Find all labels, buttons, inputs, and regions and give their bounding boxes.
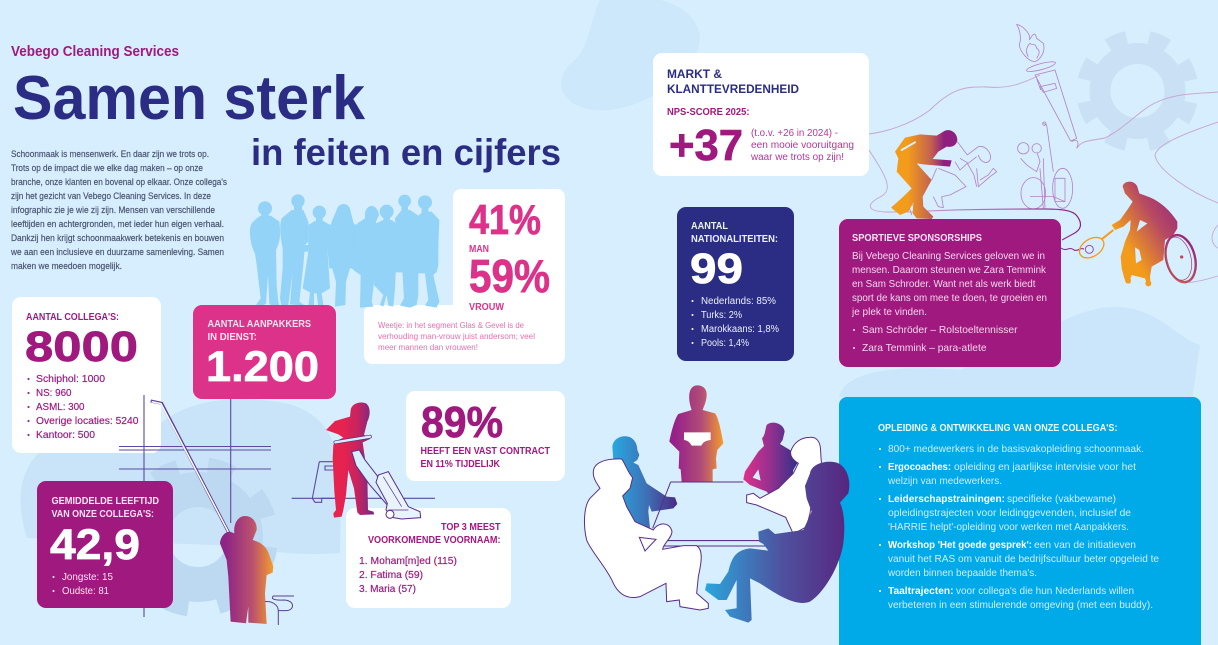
intro text: maken we meedoen mogelijk. — [11, 261, 122, 271]
panel: nationalities: 99 — [690, 245, 743, 293]
intro text: zijn het gezicht van Vebego Cleaning Services. In deze — [11, 191, 211, 201]
panel: training and development: opleiding en jaarlijkse intervisie voor het — [954, 462, 1136, 473]
intro text — [10, 149, 227, 271]
panel: nationalities: NATIONALITEITEN: — [691, 234, 778, 245]
panel: sports sponsorships — [839, 219, 1061, 367]
panel: top 3 first names: 3. Maria (57) — [359, 584, 416, 595]
subtitle: in feiten en cijfers — [251, 132, 561, 173]
intro text: branche, onze klanten en bovenal op elkaar. Onze collega's — [11, 177, 227, 187]
panel: sports sponsorships: en Sam Schroder. Want net als werk biedt — [852, 279, 1036, 290]
panel: sports sponsorships: Zara Temmink – para-atlete — [862, 343, 987, 354]
illustration: line art of torch, athletes and connecting ribbon — [869, 24, 1218, 215]
panel: contract share — [406, 391, 565, 481]
panel: training and development: Ergocoaches: — [888, 462, 951, 473]
panel: training and development: Taaltrajecten: — [888, 586, 954, 597]
panel: market and customer satisfaction: NPS-SCORE 2025: — [667, 107, 750, 118]
illustration: group of people silhouettes — [250, 194, 439, 308]
panel: training and development: specifieke (vakbewame) — [1007, 494, 1116, 505]
illustration: window cleaner with pole — [151, 401, 294, 625]
panel: training and development: Leiderschapstrainingen: — [888, 494, 1005, 505]
panel: number of colleagues — [12, 297, 161, 453]
panel: contract share: 89% — [421, 398, 503, 447]
panel: nationalities: AANTAL — [691, 221, 728, 232]
panel: nationalities: Pools: 1,4% — [701, 338, 749, 349]
panel: top 3 first names: 2. Fatima (59) — [359, 570, 423, 581]
intro text: we aan een inclusieve en duurzame samenleving. Samen — [10, 247, 224, 257]
panel: contract share: EN 11% TIJDELIJK — [420, 459, 501, 470]
panel: sports sponsorships: mensen. Daarom steunen we Zara Temmink — [852, 265, 1047, 276]
panel: training and development: een van de initiatieven — [1034, 540, 1136, 551]
panel: number of colleagues: ASML: 300 — [36, 402, 85, 413]
intro text: infographic zie je wie zij zijn. Mensen van verschillende — [11, 205, 215, 215]
panel: sports sponsorships: Bij Vebego Cleaning Services geloven we in — [852, 251, 1045, 262]
illustration: floor line and warning sign — [292, 462, 435, 502]
panel: gender split: MAN — [469, 244, 489, 255]
panel: top 3 first names: 1. Moham[m]ed (115) — [359, 556, 457, 567]
panel: training and development: 800+ medewerkers in de basisvakopleiding schoonmaak. — [888, 444, 1144, 455]
panel: gender split: 59% — [469, 250, 550, 302]
intro text: leeftijden en achtergronden, met ieder hun eigen verhaal. — [11, 219, 224, 229]
panel: average age: GEMIDDELDE LEEFTIJD — [52, 496, 159, 507]
panel: top 3 first names: VOORKOMENDE VOORNAAM: — [368, 535, 500, 546]
panel: average age: Oudste: 81 — [62, 586, 109, 597]
illustration: runner silhouette and ribbon — [891, 130, 1084, 250]
panel: number of aanpakkers — [193, 305, 336, 399]
panel: training and development: voor collega's die hun Nederlands willen — [956, 586, 1134, 597]
intro text: Schoonmaak is mensenwerk. En daar zijn we trots op. — [11, 149, 209, 159]
panel: gender split: 41% — [469, 196, 541, 243]
panel: average age: Jongste: 15 — [62, 572, 113, 583]
panel: number of colleagues: AANTAL COLLEGA'S: — [26, 312, 119, 323]
panel: contract share: HEEFT EEN VAST CONTRACT — [420, 446, 551, 457]
panel: training and development: verbeteren in een stimulerende omgeving (met een buddy). — [888, 600, 1153, 611]
panel: top 3 first names — [346, 508, 511, 608]
panel: number of colleagues: Schiphol: 1000 — [36, 374, 105, 385]
panel: nationalities: Turks: 2% — [701, 310, 742, 321]
panel: sports sponsorships: Sam Schröder – Rolstoeltennisser — [862, 325, 1018, 336]
panel: market and customer satisfaction: een mooie vooruitgang — [751, 140, 854, 151]
panel: gender split — [364, 189, 565, 364]
panel: sports sponsorships: sport de kans om mee te doen, te groeien en — [852, 293, 1047, 304]
scaffolding lines — [119, 395, 271, 617]
panel: number of colleagues: NS: 960 — [36, 388, 72, 399]
panel: gender split: Weetje: in het segment Glas & Gevel is de — [378, 320, 524, 330]
panel: number of colleagues: 8000 — [25, 323, 138, 371]
panel: average age: VAN ONZE COLLEGA'S: — [52, 509, 154, 520]
panel: nationalities: Marokkaans: 1,8% — [701, 324, 779, 335]
illustration: person with vacuum cleaner — [326, 402, 421, 519]
panel: market and customer satisfaction: MARKT & — [667, 67, 722, 81]
panel: gender split: VROUW — [469, 302, 505, 313]
panel: sports sponsorships: SPORTIEVE SPONSORSHIPS — [852, 232, 982, 244]
illustration: meeting around a table — [584, 385, 849, 623]
illustration: wheelchair tennis player — [1076, 182, 1218, 286]
panel: market and customer satisfaction: +37 — [669, 121, 743, 170]
panel: nationalities: Nederlands: 85% — [701, 296, 776, 307]
panel: gender split: meer mannen dan vrouwen! — [378, 342, 478, 352]
panel: market and customer satisfaction: (t.o.v. +26 in 2024) - — [751, 128, 838, 139]
brand name: Vebego Cleaning Services — [11, 44, 179, 60]
panel: top 3 first names: TOP 3 MEEST — [441, 522, 501, 533]
title: Samen sterk — [13, 64, 365, 133]
panel: number of aanpakkers: IN DIENST: — [208, 332, 257, 343]
panel: training and development — [839, 397, 1201, 645]
panel: average age — [37, 481, 173, 608]
panel: training and development: Workshop 'Het goede gesprek': — [888, 540, 1032, 551]
panel: market and customer satisfaction: KLANTTEVREDENHEID — [667, 82, 799, 96]
panel: average age: 42,9 — [50, 521, 140, 569]
panel: training and development: OPLEIDING & ONTWIKKELING VAN ONZE COLLEGA'S: — [878, 422, 1118, 434]
intro text: Trots op de impact die we elke dag maken – op onze — [11, 163, 203, 173]
panel: training and development: worden binnen bepaalde thema's. — [887, 568, 1037, 579]
panel: training and development: vanuit het RAS om vanuit de bedrijfscultuur beter opgeleid te — [888, 554, 1159, 565]
panel: number of aanpakkers: 1.200 — [206, 343, 319, 391]
panel: number of colleagues: Overige locaties: 5240 — [36, 416, 139, 427]
panel: sports sponsorships: je plek te vinden. — [851, 307, 927, 318]
panel: training and development: opleidingstrajecten voor leidinggevenden, inclusief de — [888, 508, 1131, 519]
panel: market and customer satisfaction: waar we trots op zijn! — [750, 152, 844, 163]
intro text: Dankzij hen krijgt schoonmaakwerk betekenis en bouwen — [11, 233, 224, 243]
panel: nationalities — [677, 207, 794, 361]
panel: training and development: welzijn van medewerkers. — [887, 476, 1002, 487]
panel: number of colleagues: Kantoor: 500 — [36, 430, 95, 441]
panel: market and customer satisfaction — [653, 53, 869, 176]
panel: training and development: 'HARRIE helpt'-opleiding voor werken met Aanpakkers. — [888, 522, 1129, 533]
panel: number of aanpakkers: AANTAL AANPAKKERS — [208, 319, 311, 330]
panel: gender split: verhouding man-vrouw juist andersom; veel — [378, 331, 535, 341]
